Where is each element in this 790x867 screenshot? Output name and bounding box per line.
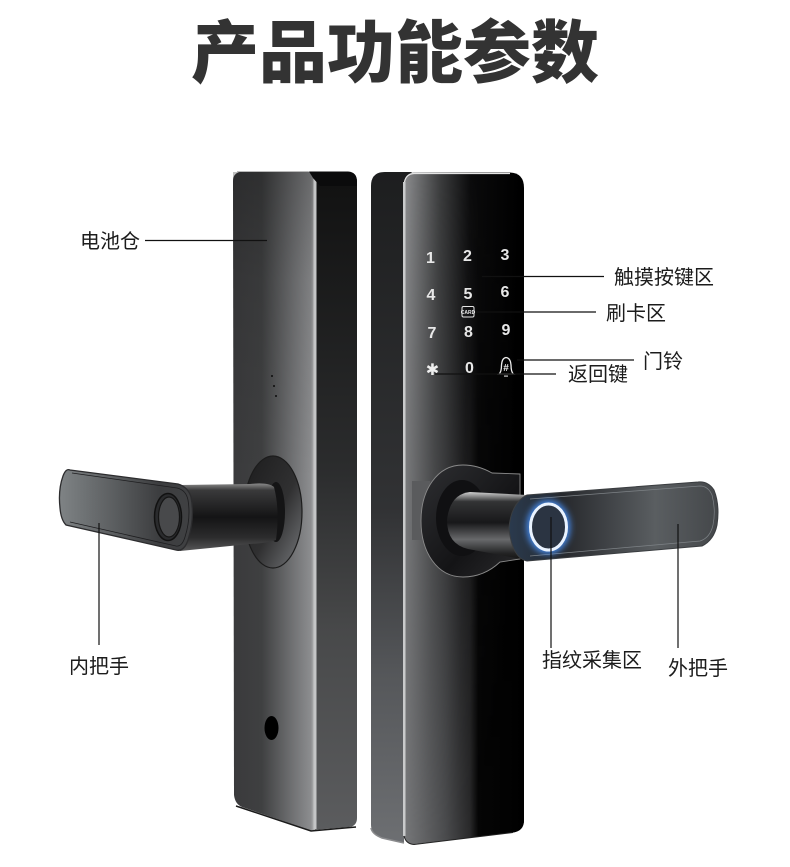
- shaft: [180, 483, 278, 551]
- callout: back key: 返回键: [568, 363, 628, 386]
- keypad: 8: [464, 324, 473, 341]
- callout: touch keypad: 触摸按键区: [614, 266, 714, 289]
- right lock side face: [371, 172, 412, 843]
- callout: outer handle: 外把手: [668, 657, 728, 680]
- shaft: [447, 492, 527, 560]
- keypad: 6: [501, 284, 510, 301]
- keypad: 5: [464, 286, 473, 303]
- rose: [244, 456, 302, 568]
- callout: fingerprint area: 指纹采集区: [542, 649, 642, 672]
- callout: battery compartment: 电池仓: [80, 230, 140, 253]
- keypad: 9: [502, 322, 511, 339]
- callout: inner handle: 内把手: [69, 655, 129, 678]
- left lock front face: [233, 172, 315, 830]
- shaft base: [267, 482, 285, 542]
- keypad: 0: [465, 360, 474, 377]
- bracket: [412, 481, 430, 540]
- fingerprint ring: [530, 504, 566, 550]
- card icon: CARD: [461, 310, 476, 316]
- left handle: [59, 456, 302, 568]
- lever: [509, 482, 718, 561]
- keypad: 2: [463, 248, 472, 265]
- callout: card area: 刷卡区: [606, 302, 666, 325]
- left lock side face: [309, 172, 357, 830]
- callout: doorbell: 门铃: [643, 350, 683, 373]
- thumb turn: [154, 494, 182, 540]
- right handle: [412, 465, 718, 577]
- right lock front face: [404, 172, 524, 844]
- keypad: ✱: [426, 360, 439, 379]
- key hole: [264, 716, 278, 740]
- doorbell icon: #: [503, 363, 509, 374]
- left lock: inner panel: [233, 172, 357, 831]
- keypad: 1: [426, 250, 435, 267]
- keypad: 4: [427, 287, 436, 304]
- rose: [421, 465, 520, 577]
- right lock: outer panel: [371, 172, 524, 844]
- keypad: [426, 247, 514, 379]
- speaker dots: [271, 375, 277, 397]
- title: 产品功能参数: [191, 16, 599, 92]
- lever: [59, 470, 192, 550]
- keypad: 3: [501, 247, 510, 264]
- keypad: 7: [428, 325, 437, 342]
